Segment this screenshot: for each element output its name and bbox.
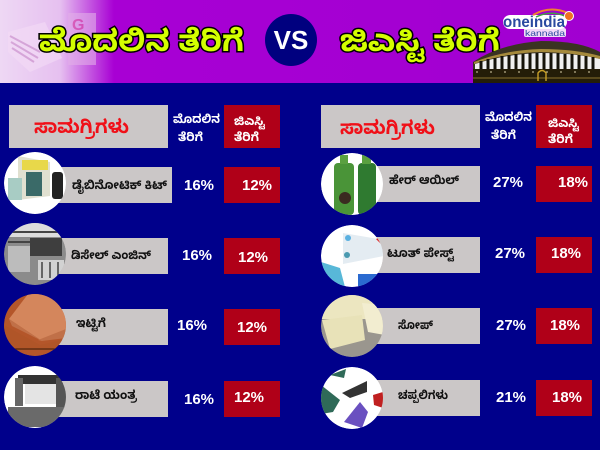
icon: toothpaste (321, 225, 384, 287)
row: toothpaste (321, 225, 592, 287)
row: slippers (321, 367, 592, 429)
icon: hair oil (321, 153, 383, 215)
row: diesel engine: 16% (182, 247, 212, 264)
header banner (0, 0, 600, 83)
icon: faded tax documents (8, 13, 96, 72)
panel: right table (321, 105, 592, 429)
row: soap: 27% (496, 317, 526, 334)
VS badge (265, 14, 317, 66)
left column heading: items (9, 105, 168, 148)
row: toothpaste: 27% (495, 245, 525, 262)
left column heading: GST tax (224, 105, 280, 148)
row: diesel engine: ಡಿಸೇಲ್ ಎಂಜಿನ್ (71, 248, 151, 262)
row: bricks (0, 294, 280, 356)
icon: parliament building (473, 41, 600, 83)
row: sewing machine: 12% (234, 389, 264, 406)
icon: diabetic kit (4, 152, 66, 214)
logo: oneindia kannada: oneindia (503, 14, 565, 31)
row: diesel engine: 12% (238, 249, 268, 266)
right column heading: previous tax: ತೆರಿಗೆ (491, 128, 516, 142)
right column heading: previous tax: ಮೊದಲಿನ (485, 110, 532, 124)
row: slippers: ಚಪ್ಪಲಿಗಳು (398, 388, 448, 404)
icon: soap (321, 295, 385, 357)
row: soap (321, 295, 592, 357)
icon: faded tax documents: G (72, 17, 84, 34)
left column heading: previous tax: ಮೊದಲಿನ (173, 112, 220, 126)
row: diabetic kit: ಡೈಬಿನೋಟಿಕ್ ಕಿಟ್ (72, 178, 168, 195)
icon: slippers (321, 367, 383, 429)
panel: left table (0, 105, 280, 428)
row: toothpaste: ಟೂತ್ ಪೇಸ್ಟ್ (387, 246, 454, 262)
VS badge: VS (274, 25, 308, 55)
icon: bricks (4, 294, 66, 356)
row: soap: 18% (550, 317, 580, 334)
right column heading: GST tax (536, 105, 592, 148)
row: sewing machine: ರಾಟೆ ಯಂತ್ರ (75, 388, 137, 403)
row: toothpaste: 18% (551, 245, 581, 262)
row: diabetic kit (4, 152, 280, 214)
row: bricks: ಇಟ್ಟಿಗೆ (76, 316, 106, 332)
icon: diesel engine (4, 223, 66, 285)
right column heading: GST tax: ಜಿಎಸ್ಟಿ (548, 116, 579, 132)
left column heading: GST tax: ತೆರಿಗೆ (234, 130, 259, 144)
left column heading: previous tax: ತೆರಿಗೆ (178, 130, 203, 144)
left column heading: items: ಸಾಮಗ್ರಿಗಳು (34, 117, 129, 139)
row: hair oil (321, 153, 592, 215)
row: sewing machine (4, 366, 280, 428)
row: sewing machine: 16% (184, 391, 214, 408)
logo: oneindia kannada: kannada (525, 28, 565, 38)
logo: oneindia kannada (503, 9, 574, 38)
row: diabetic kit: 12% (242, 177, 272, 194)
row: slippers: 21% (496, 389, 526, 406)
row: hair oil: 27% (493, 174, 523, 191)
row: slippers: 18% (552, 389, 582, 406)
right column heading: items (321, 105, 480, 148)
row: hair oil: ಹೇರ್ ಆಯಿಲ್ (389, 173, 459, 187)
right column heading: GST tax: ತೆರಿಗೆ (548, 132, 573, 146)
row: bricks: 12% (237, 319, 267, 336)
right column heading: items: ಸಾಮಗ್ರಿಗಳು (340, 118, 435, 140)
row: diabetic kit: 16% (184, 177, 214, 194)
row: soap: ಸೋಪ್ (398, 318, 433, 332)
row: hair oil: 18% (558, 174, 588, 191)
row: bricks: 16% (177, 317, 207, 334)
left column heading: previous tax (173, 112, 220, 144)
row: diesel engine (4, 223, 280, 285)
right column heading: previous tax (485, 110, 532, 142)
title: GST tax: ಜಿಎಸ್ಟಿ ತೆರಿಗೆ (340, 25, 500, 63)
title: previous tax: ಮೊದಲಿನ ತೆರಿಗೆ (39, 25, 244, 58)
icon: sewing machine (4, 366, 66, 428)
left column heading: GST tax: ಜಿಎಸ್ಟಿ (234, 114, 265, 130)
